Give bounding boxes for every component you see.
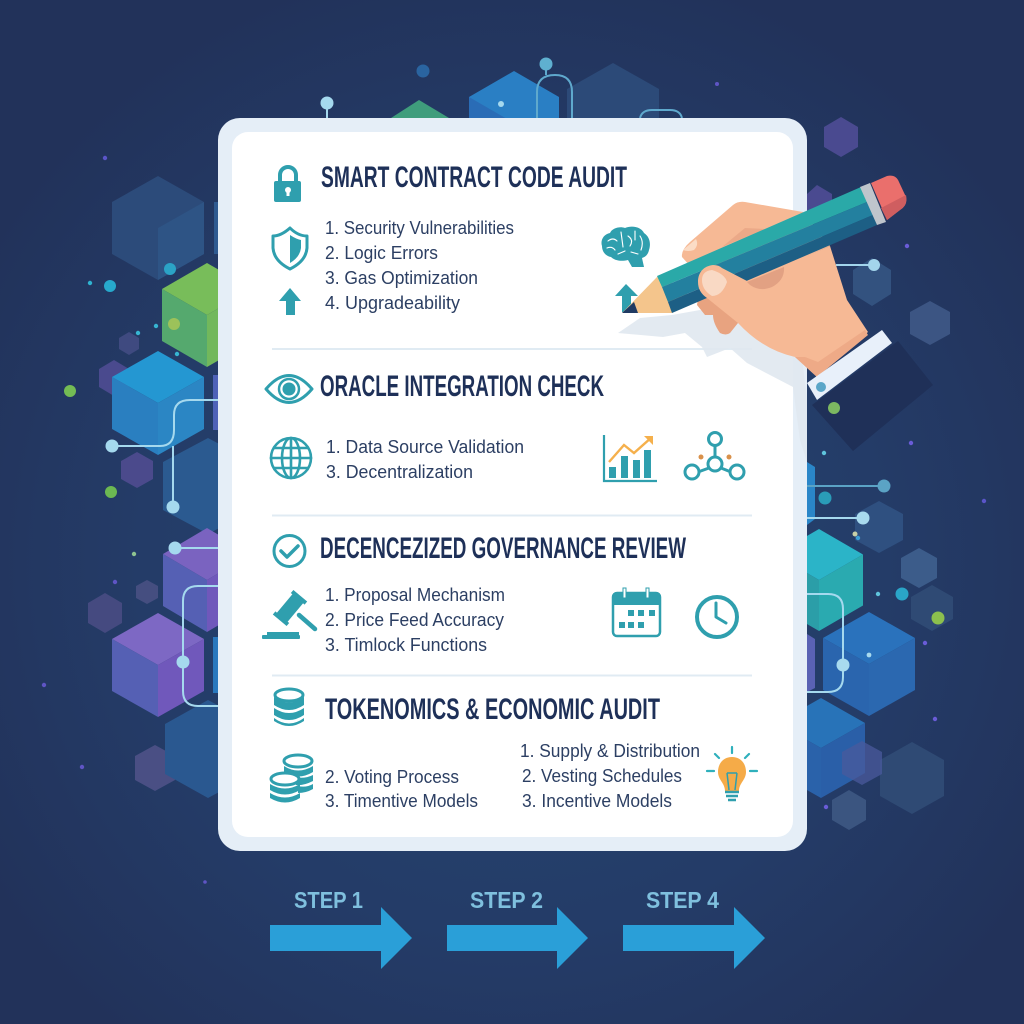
lower fingers [697,285,770,334]
heading: smart contract code audit: SMART CONTRACT CODE AUDIT [321,161,627,194]
icon: up arrow near pencil [615,284,638,312]
illustration: hand holding pencil [622,176,933,451]
thumb and palm [698,246,868,377]
right hexagon and cube cluster [775,117,953,830]
blue cube lower right [777,698,865,798]
blue cube right [823,612,915,716]
list: oracle items: 1. Data Source Validation [326,436,524,457]
right circuit lines and nodes [807,259,890,692]
sleeve button [828,402,840,414]
left circuit lines and nodes [106,400,219,706]
icon: database stack [274,689,304,726]
icon: up arrow [279,288,301,315]
arrow: step 3 [623,907,765,969]
cuff [807,330,892,400]
sleeve [812,341,933,451]
icon: bar chart with rising arrow [604,435,657,481]
icon: light bulb [707,747,757,800]
heading: oracle integration check: ORACLE INTEGRATION CHECK [320,370,604,403]
section dividers [272,348,752,676]
list: governance items: 3. Timlock Functions [325,634,487,655]
arrow: step 2 [447,907,588,969]
section: smart contract code audit [273,161,650,315]
list: tokenomics right items: 3. Incentive Models [522,790,672,811]
left hexagon and cube cluster [88,176,253,798]
list: tokenomics right items [520,740,700,811]
list: oracle items: 3. Decentralization [326,461,473,482]
list: tokenomics left items [325,766,478,811]
green cube [162,263,252,367]
hand shadow on card [618,310,807,462]
list: governance items [325,584,505,655]
icon: eye [266,376,312,402]
icon: check circle [274,536,305,566]
icon: gavel [262,590,315,639]
icon: globe [271,438,311,478]
blue cube [112,351,204,455]
pencil [622,176,906,313]
left scattered dots [42,156,207,884]
list: tokenomics right items: 1. Supply & Distribution [520,740,700,761]
step 2 label: STEP 2 [470,887,543,913]
index fingernail [683,239,697,251]
icon: coin stacks [270,755,313,802]
icon: brain [601,227,650,267]
list: code audit items: 4. Upgradeability [325,292,461,313]
hand back and index finger [682,202,830,282]
section: governance review [262,532,737,655]
teal cube [775,529,863,631]
purple cube large [112,613,204,717]
list: code audit items [325,217,514,313]
icon: shield [273,228,307,269]
wrist shadow [795,330,868,377]
icon: calendar [613,588,660,636]
section: tokenomics and economic audit [270,689,757,811]
right scattered dots [818,244,986,809]
list: governance items: 1. Proposal Mechanism [325,584,505,605]
section: oracle integration check [266,370,744,482]
thumbnail [702,270,727,296]
list: tokenomics left items: 3. Timentive Models [325,790,478,811]
list: code audit items: 2. Logic Errors [325,242,438,263]
list: tokenomics right items: 2. Vesting Schedules [522,765,682,786]
step 4 label: STEP 4 [646,887,719,913]
top cubes and nodes [320,58,719,125]
heading: governance review: DECENCEZIZED GOVERNANCE REVIEW [320,532,686,565]
icon: clock [697,597,737,637]
purple cube small [163,528,251,632]
list: code audit items: 1. Security Vulnerabilities [325,217,514,238]
panel: audit checklist card [218,118,807,851]
step sequence [270,887,765,969]
arrow: step 1 [270,907,412,969]
step 1 label: STEP 1 [294,887,363,913]
list: code audit items: 3. Gas Optimization [325,267,478,288]
list: governance items: 2. Price Feed Accuracy [325,609,505,630]
heading: tokenomics: TOKENOMICS & ECONOMIC AUDIT [325,693,660,726]
icon: network nodes [685,432,744,479]
icon: padlock [274,167,301,202]
list: tokenomics left items: 2. Voting Process [325,766,459,787]
finger shadow [722,228,765,247]
list: oracle items [326,436,524,482]
cuff button [816,382,826,392]
palm shadow [747,267,784,289]
